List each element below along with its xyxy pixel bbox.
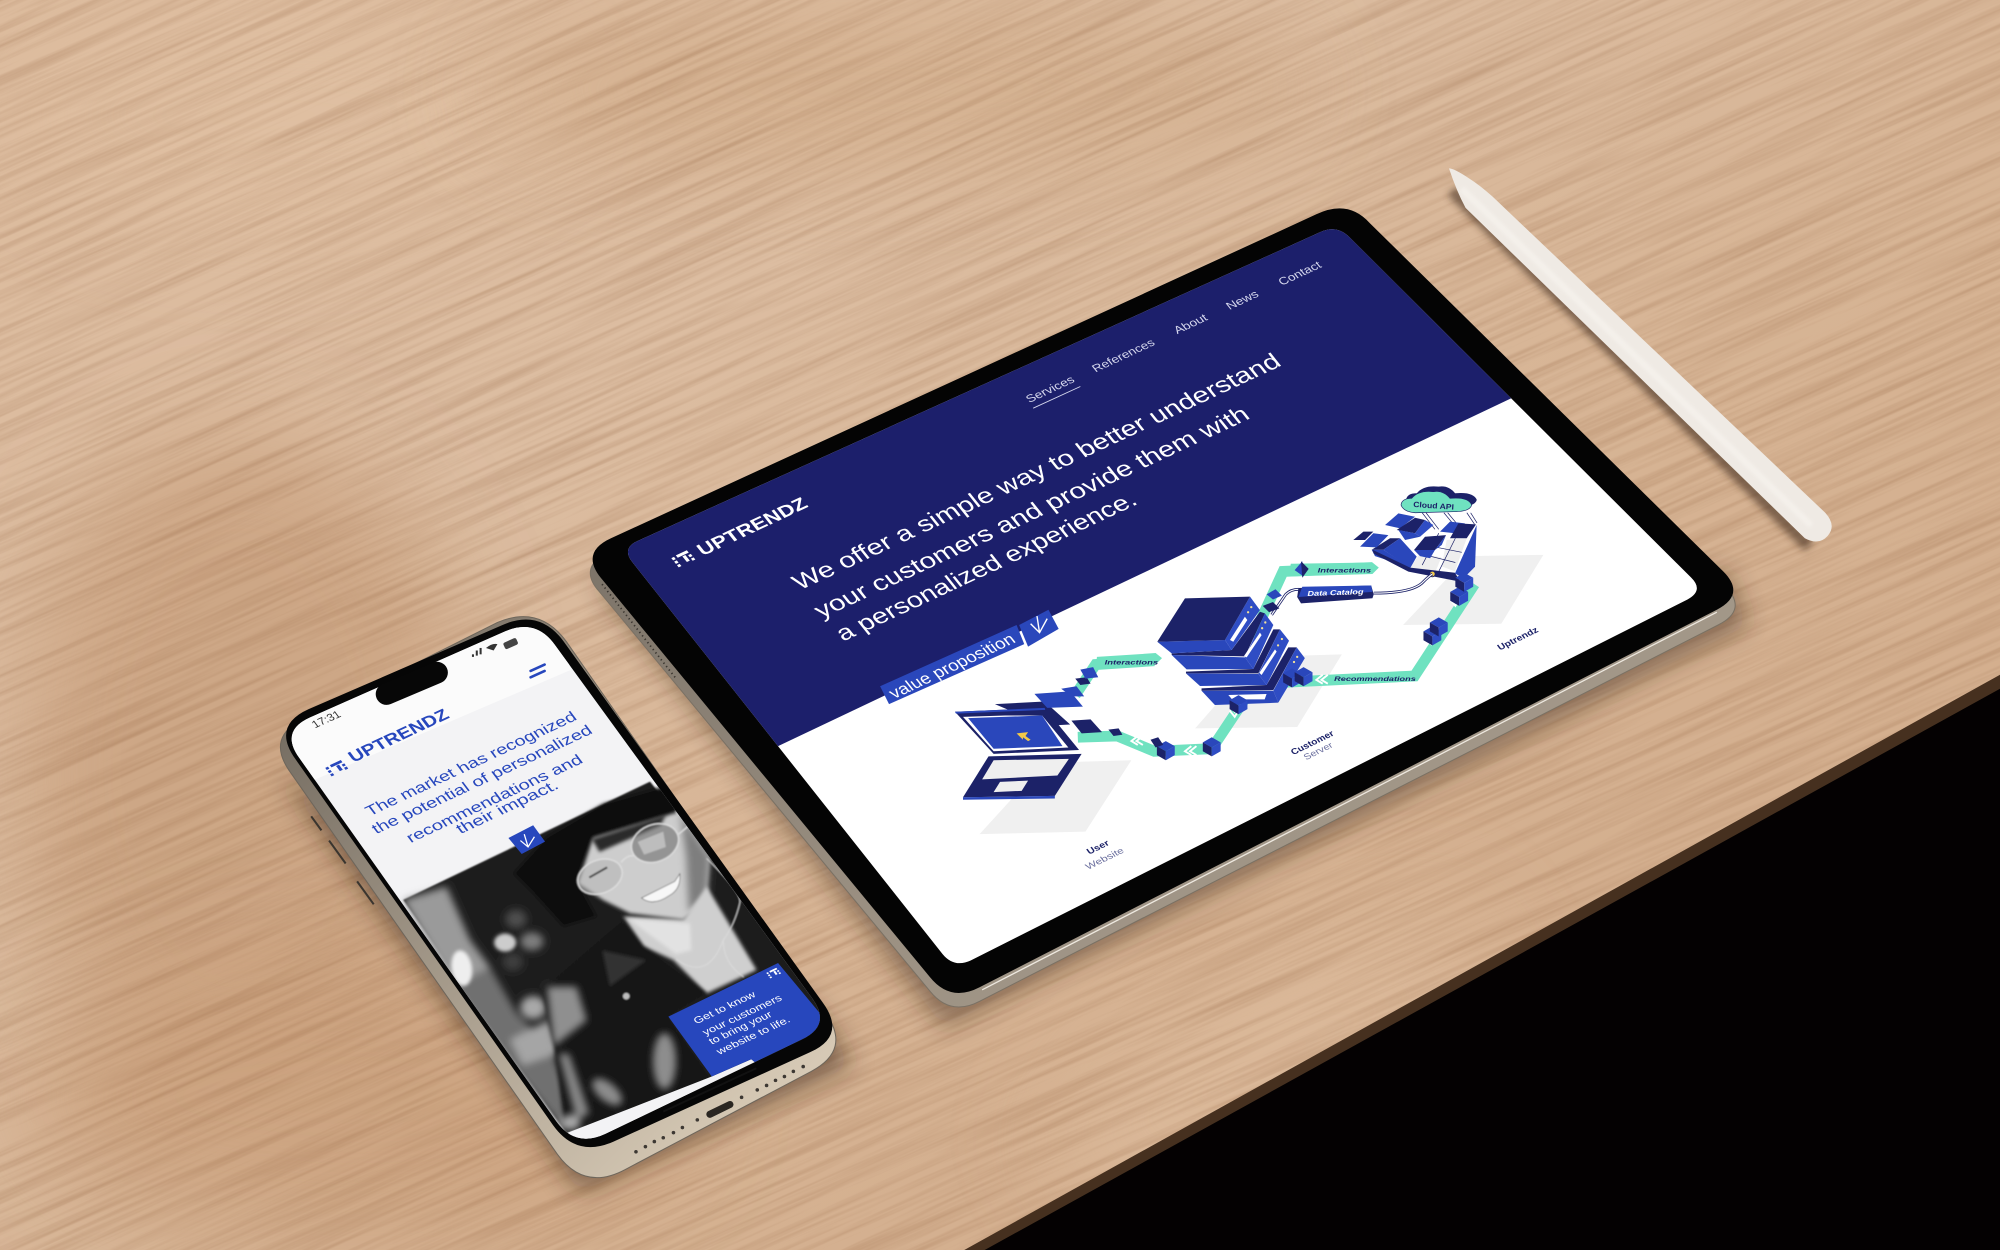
smile <box>642 874 680 902</box>
phone arrow button <box>508 825 545 854</box>
tablet navigation <box>1023 259 1325 408</box>
phone shadow <box>283 778 852 1193</box>
interactions label upper: Interactions <box>1318 568 1372 575</box>
tablet headline: a personalized experience. <box>830 487 1143 646</box>
white strip <box>566 1020 880 1173</box>
bokeh lights <box>494 934 516 952</box>
rack 3 <box>1186 629 1289 686</box>
rack 1 <box>1157 597 1260 653</box>
earphone cable <box>676 858 744 977</box>
chevrons on paths <box>1131 594 1459 755</box>
navy hero panel <box>628 229 1511 746</box>
floor shadow: uptrendz <box>1403 555 1543 625</box>
server stack <box>1157 597 1305 705</box>
tablet rim <box>590 222 1735 1007</box>
hand blur <box>559 1033 676 1130</box>
phone hamburger icon <box>531 665 545 677</box>
phone side buttons <box>311 816 374 904</box>
tablet navigation: Services <box>1023 374 1077 405</box>
diagram paths <box>1075 568 1474 751</box>
card text: your customers <box>700 993 785 1038</box>
wordmark: UPTRENDZ <box>693 494 812 559</box>
interactions label lower <box>1096 653 1162 668</box>
data cubes along paths <box>1151 561 1473 760</box>
floor shadow: customer <box>1195 654 1342 728</box>
interactions label lower: Interactions <box>1105 660 1159 667</box>
portrait photo <box>403 782 855 1133</box>
home indicator <box>663 1068 756 1112</box>
tablet headline <box>787 349 1286 646</box>
phone rim <box>280 617 836 1178</box>
phone logo <box>325 705 453 776</box>
jacket <box>542 920 712 1133</box>
user label <box>1083 838 1126 871</box>
customer label: Customer <box>1289 729 1336 757</box>
tablet navigation: News <box>1224 288 1262 312</box>
shirt <box>623 886 756 993</box>
value proposition button <box>880 610 1059 704</box>
card text: to bring your <box>707 1009 775 1047</box>
tablet navigation: Contact <box>1276 259 1325 288</box>
card text: Get to know <box>692 990 758 1026</box>
phone bezel <box>286 619 832 1147</box>
data catalog wires <box>1272 574 1432 615</box>
user label: Website <box>1083 846 1126 871</box>
tablet bezel <box>593 208 1733 993</box>
hair <box>513 787 683 927</box>
user label: User <box>1085 838 1111 856</box>
tablet navigation: References <box>1090 337 1158 375</box>
phone headline: the potential of personalized <box>368 722 596 837</box>
phone status time: 17:31 <box>309 708 344 731</box>
uptrendz data cube <box>1353 513 1477 582</box>
floor shadow: user <box>980 760 1131 834</box>
rack 2 <box>1172 612 1273 669</box>
logo mark <box>325 760 348 776</box>
value proposition button: value proposition <box>884 630 1019 702</box>
rack 4 <box>1202 647 1305 705</box>
phone screen <box>292 627 820 1139</box>
phone speaker port <box>634 1065 805 1154</box>
card logo mark <box>766 968 781 978</box>
face <box>578 812 710 920</box>
tablet screen <box>628 229 1697 964</box>
recommendations label: Recommendations <box>1334 676 1416 683</box>
node labels <box>1083 625 1541 871</box>
logo mark <box>671 550 695 567</box>
tablet shadow <box>594 574 1747 1027</box>
phone headline: The market has recognized <box>362 708 580 819</box>
phone status icons <box>472 638 518 657</box>
apple pencil <box>1448 168 1832 551</box>
card text: website to life. <box>713 1015 793 1057</box>
bezel highlight <box>982 612 1717 990</box>
data catalog label <box>1297 585 1374 603</box>
card text <box>692 990 793 1057</box>
glasses <box>576 822 688 896</box>
wordmark: UPTRENDZ <box>344 705 453 766</box>
cloud api <box>1401 486 1477 513</box>
tablet logo <box>671 494 812 567</box>
white card corner <box>818 1000 842 1040</box>
tablet <box>590 191 1747 1007</box>
uptrendz label: Uptrendz <box>1495 625 1541 652</box>
dynamic island <box>372 658 451 708</box>
table edge and dark floor <box>964 675 2000 1250</box>
data catalog label: Data Catalog <box>1307 588 1365 598</box>
phone headline: recommendations and <box>402 751 586 846</box>
blue card <box>668 963 842 1077</box>
tablet headline: your customers and provide them with <box>809 402 1255 623</box>
photo background blur <box>403 886 566 1133</box>
tablet headline: We offer a simple way to better understand <box>787 349 1286 595</box>
cloud api: Cloud API <box>1413 500 1454 512</box>
tablet speaker dots <box>602 584 676 679</box>
customer label: Server <box>1302 741 1335 762</box>
phone headline: their impact. <box>452 777 562 837</box>
phone <box>280 616 836 1178</box>
interactions label upper <box>1288 562 1379 577</box>
laptop icon <box>955 667 1122 800</box>
tablet navigation: About <box>1171 312 1211 336</box>
